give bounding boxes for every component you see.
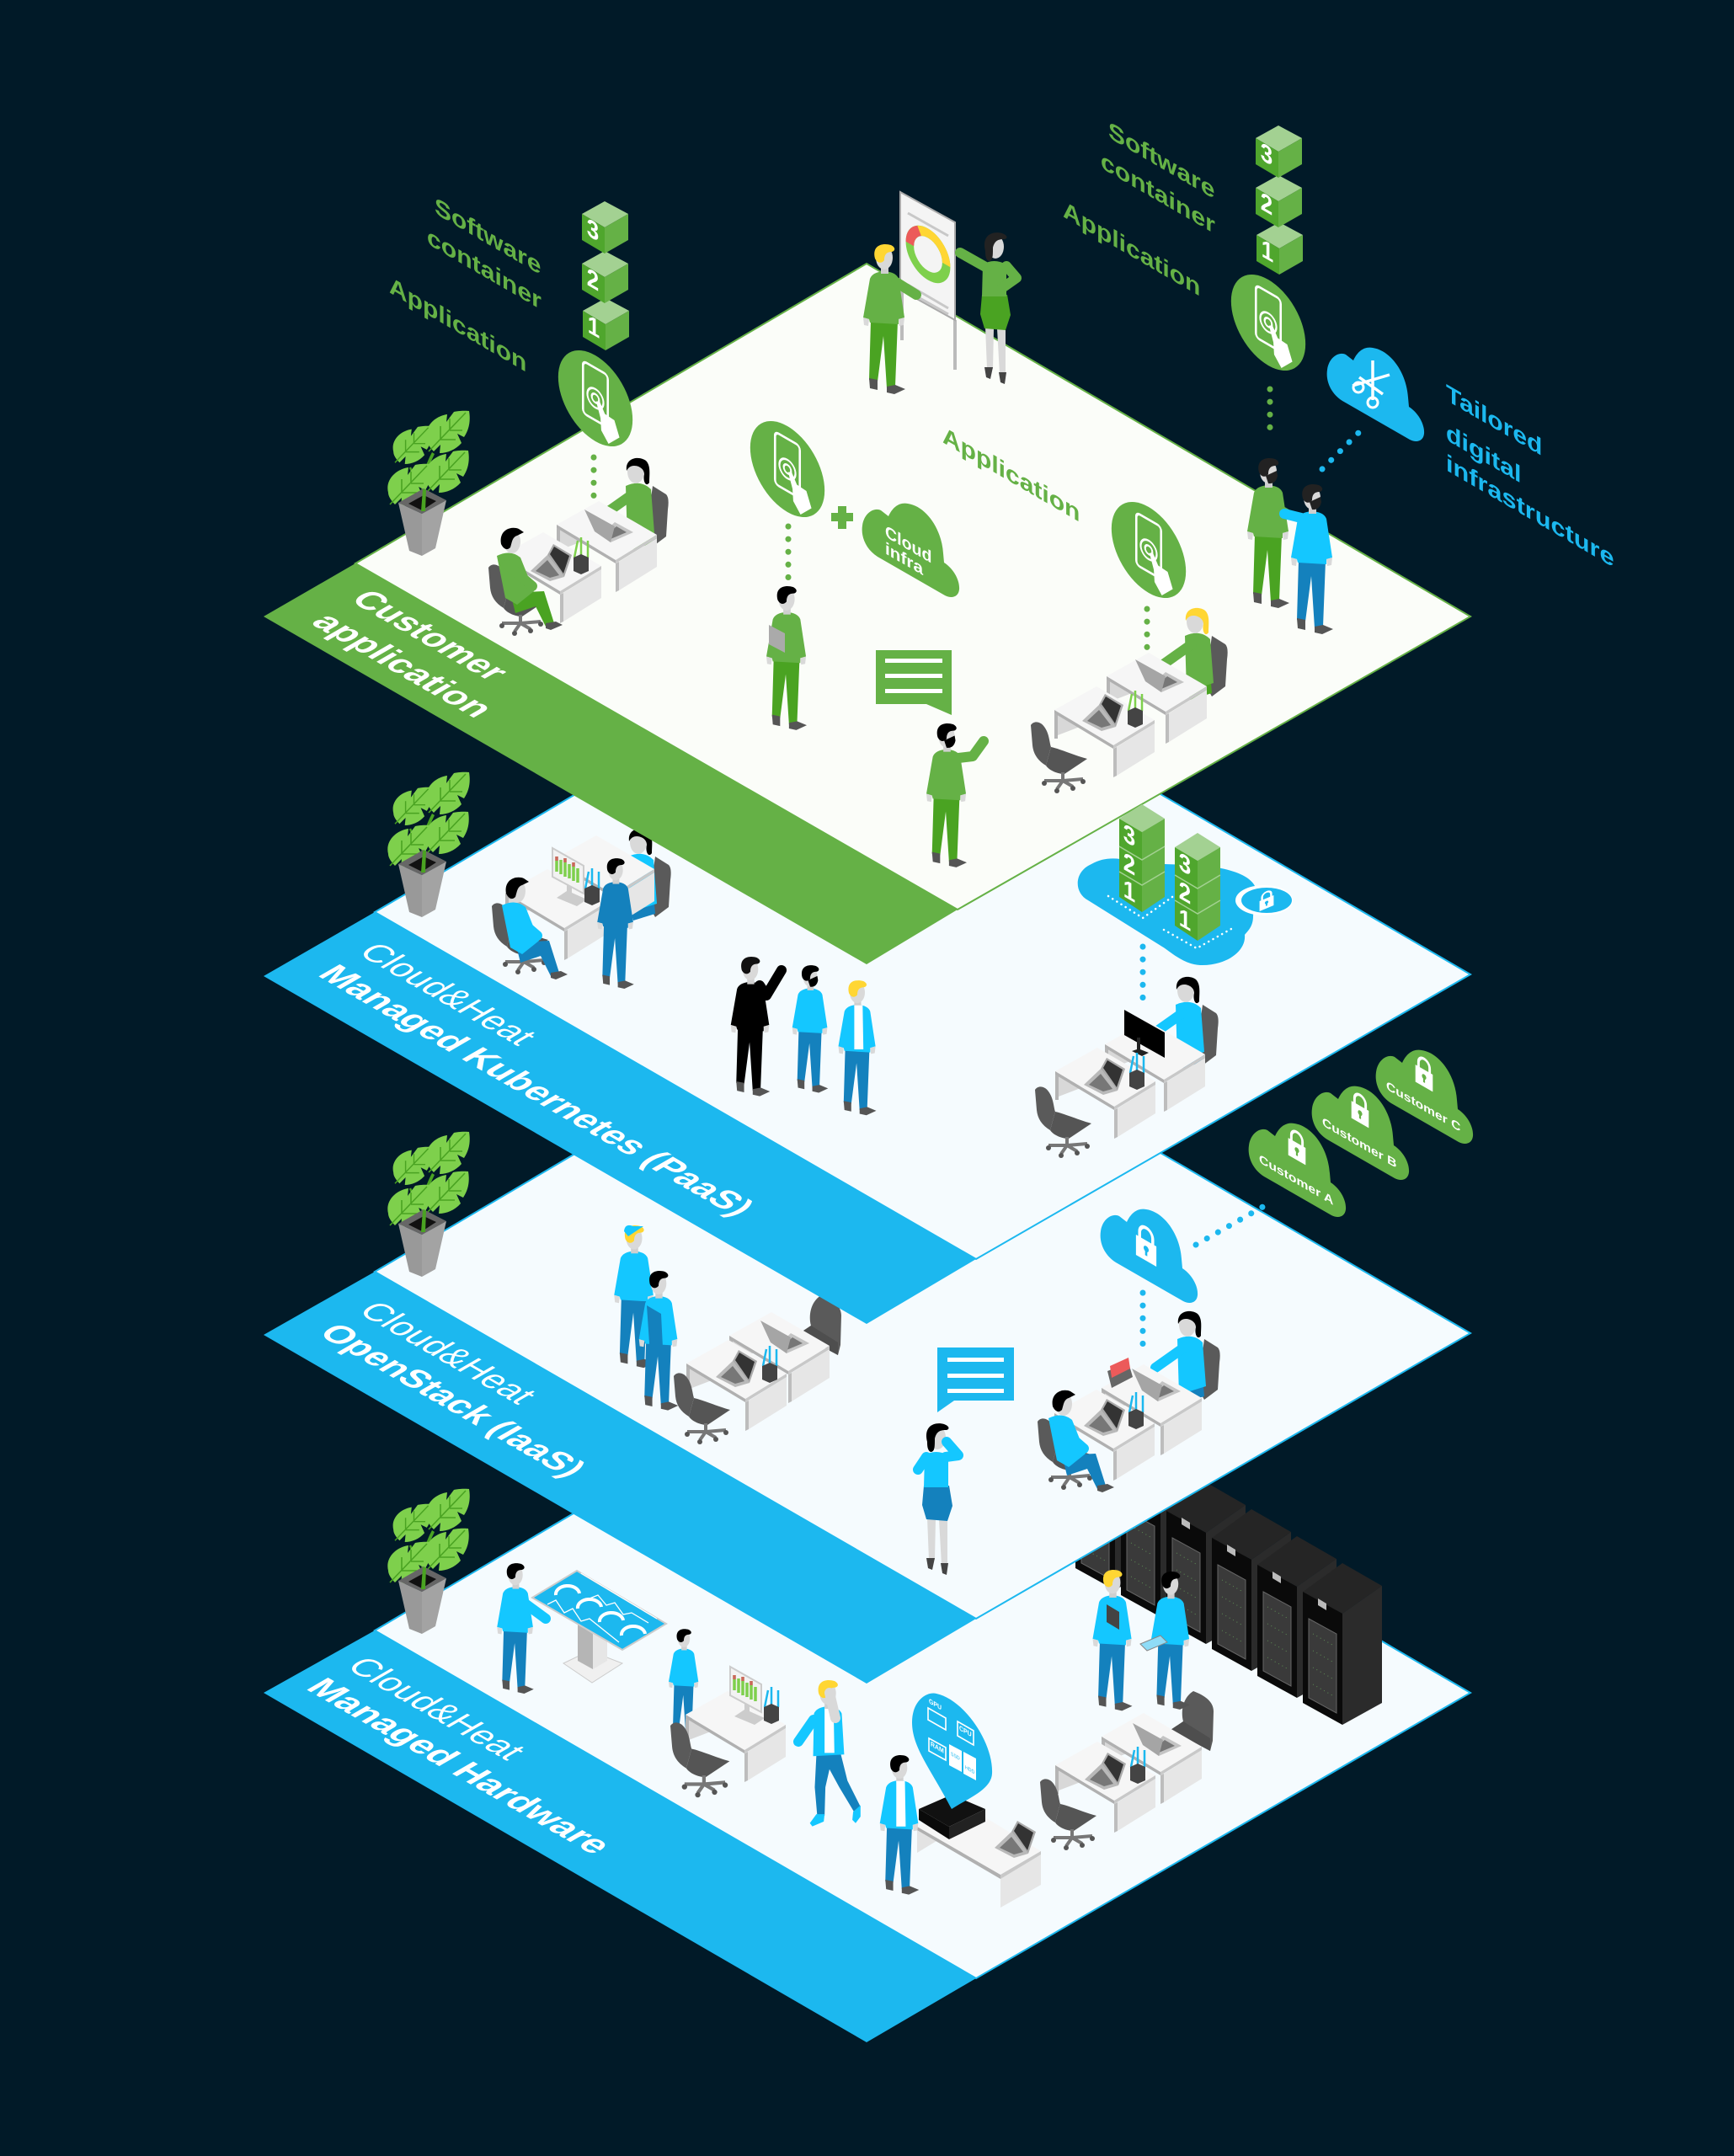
band label: Cloud&Heat Managed Hardware: Cloud&Heat	[339, 1652, 535, 1765]
desks with staff, left	[488, 458, 669, 636]
group: bearded man	[792, 965, 828, 1092]
label: Software container Application	[1063, 116, 1215, 302]
platform label band	[264, 912, 976, 1324]
standing woman behind desk	[669, 1629, 699, 1737]
middle desks	[674, 1295, 841, 1444]
cloud: Customer B: Customer B	[1322, 1114, 1396, 1171]
platform label band	[264, 563, 958, 964]
platform label band	[264, 1630, 976, 2042]
platform floor	[375, 982, 1470, 1619]
label: Software container Application: Application	[389, 271, 526, 377]
label: Software container Application: container	[1101, 147, 1215, 239]
plant	[387, 411, 470, 556]
woman with folder	[1093, 1570, 1132, 1710]
cloud: Customer C	[1376, 1050, 1473, 1144]
customer clouds	[1249, 1050, 1473, 1217]
cloud: Customer C: Customer C	[1386, 1078, 1460, 1134]
plus sign	[831, 506, 853, 529]
plant	[387, 772, 470, 917]
cloud: Customer A: Customer A	[1259, 1151, 1333, 1208]
application pin, right	[1112, 485, 1186, 615]
desks with seated staff	[1038, 1311, 1220, 1492]
pin: hardware components	[912, 1694, 992, 1809]
desk with monitor	[670, 1667, 786, 1797]
container stack two: 3	[1179, 847, 1191, 882]
container stack one: 2	[1123, 847, 1135, 882]
cloud with lock	[1101, 1209, 1198, 1303]
pin: hardware components: RAM	[931, 1740, 944, 1755]
floor label: Application: Application	[942, 421, 1080, 527]
container cubes: 3	[1261, 137, 1272, 172]
container stack one: 3	[1123, 819, 1135, 853]
label: Tailored digital infrastructure: infrastructure	[1446, 449, 1614, 573]
band label: Customer application: Customer	[343, 584, 518, 686]
container stack one	[1119, 804, 1165, 912]
container stack two: 2	[1179, 876, 1191, 910]
talking woman	[918, 1423, 958, 1575]
layer: managed Kubernetes PaaS	[264, 623, 1473, 1324]
container cubes: 2	[1261, 187, 1272, 221]
man with tablet	[1140, 1572, 1190, 1710]
desks with black monitor and seated engineer	[1035, 977, 1219, 1158]
cloud: Customer B	[1312, 1086, 1409, 1180]
lock badge	[1235, 885, 1293, 915]
container stack two: 1	[1179, 903, 1191, 937]
cloud: tailored infrastructure	[1327, 348, 1424, 441]
desks near servers	[1040, 1691, 1214, 1850]
desks with monitor	[492, 829, 671, 979]
application pin, centre	[750, 404, 824, 534]
label: Software container Application: Application	[1063, 195, 1200, 302]
walking man with folder	[766, 586, 807, 730]
group: man in black	[731, 957, 782, 1097]
platform label band	[264, 1272, 976, 1684]
touch table with operator	[497, 1563, 666, 1694]
container stack one: 1	[1123, 874, 1135, 909]
dotted connector	[1140, 947, 1145, 1004]
application pin	[558, 334, 632, 463]
label: Software container Application	[389, 192, 542, 377]
cloud: Customer A	[1249, 1123, 1346, 1217]
container cubes	[582, 201, 629, 350]
label: Tailored digital infrastructure	[1446, 379, 1614, 573]
man beside hardware desk	[880, 1755, 919, 1895]
pin: hardware components: HDD	[965, 1765, 975, 1776]
blue cloud	[1078, 858, 1255, 965]
pin: hardware components: SSD	[951, 1752, 960, 1762]
plant	[387, 1489, 470, 1634]
dotted connector	[1267, 389, 1273, 440]
cloud infra	[862, 504, 959, 597]
platform floor	[355, 264, 1470, 910]
dotted connector	[591, 457, 596, 508]
band label: Cloud&Heat OpenStack (IaaS): Cloud&Heat	[350, 1296, 547, 1409]
pin: hardware components: GPU	[929, 1697, 942, 1712]
application pin	[1231, 258, 1305, 387]
label: Software container Application: Software	[435, 192, 541, 280]
label: Tailored digital infrastructure: Tailored	[1446, 379, 1542, 462]
label: Tailored digital infrastructure: digital	[1446, 419, 1521, 488]
long desk with hardware box	[917, 1795, 1041, 1908]
cloud infra: infra	[885, 539, 924, 580]
label: Software container Application: Software	[1108, 116, 1214, 205]
platform floor	[375, 1341, 1470, 1978]
container cubes: 3	[587, 213, 599, 248]
band label: Customer application: application	[303, 607, 503, 723]
layer: OpenStack IaaS	[264, 982, 1470, 1684]
container cubes: 1	[588, 310, 600, 344]
dotted connector	[785, 526, 792, 579]
layer: managed hardware	[264, 1341, 1470, 2042]
desks with staff, right	[1031, 608, 1228, 793]
cloud infra: Cloud	[885, 522, 931, 568]
container cubes: 1	[1262, 234, 1273, 269]
band label: Cloud&Heat Managed Hardware: Managed Hardware	[298, 1673, 622, 1860]
container cubes: 2	[587, 263, 599, 297]
speech bubble	[937, 1348, 1014, 1412]
band label: Cloud&Heat Managed Kubernetes (PaaS): Managed Kubernetes (PaaS)	[310, 959, 764, 1221]
plant	[387, 1132, 470, 1277]
woman with hat	[614, 1225, 654, 1368]
dotted connector	[1144, 609, 1150, 659]
speech bubble	[876, 650, 952, 715]
walking man on phone	[798, 1680, 861, 1827]
hardware box	[919, 1795, 985, 1839]
application stack, right	[1063, 116, 1305, 440]
group: blonde woman	[839, 980, 876, 1115]
donut chart	[910, 222, 947, 286]
pin: hardware components: CPU	[959, 1724, 972, 1739]
presentation board	[900, 192, 955, 370]
handshake	[1247, 458, 1333, 634]
managed cloud with containers	[1078, 804, 1293, 965]
band label: Cloud&Heat Managed Kubernetes (PaaS): Cloud&Heat	[350, 937, 547, 1050]
platform floor	[375, 623, 1470, 1259]
layer: customer application	[264, 116, 1614, 964]
dotted connectors	[1143, 1202, 1272, 1353]
presenter woman	[960, 232, 1016, 384]
man with backpack	[639, 1271, 678, 1411]
container cubes	[1256, 125, 1303, 275]
container stack two	[1175, 833, 1220, 941]
band label: Cloud&Heat OpenStack (IaaS): OpenStack (IaaS)	[311, 1318, 595, 1482]
server racks	[1075, 1428, 1382, 1725]
application stack, left	[389, 192, 632, 508]
label: Software container Application: container	[427, 222, 542, 315]
standing man at desk	[597, 858, 634, 989]
presenter man	[863, 244, 916, 394]
dotted connector	[1322, 433, 1358, 469]
man under bubble	[926, 723, 984, 867]
